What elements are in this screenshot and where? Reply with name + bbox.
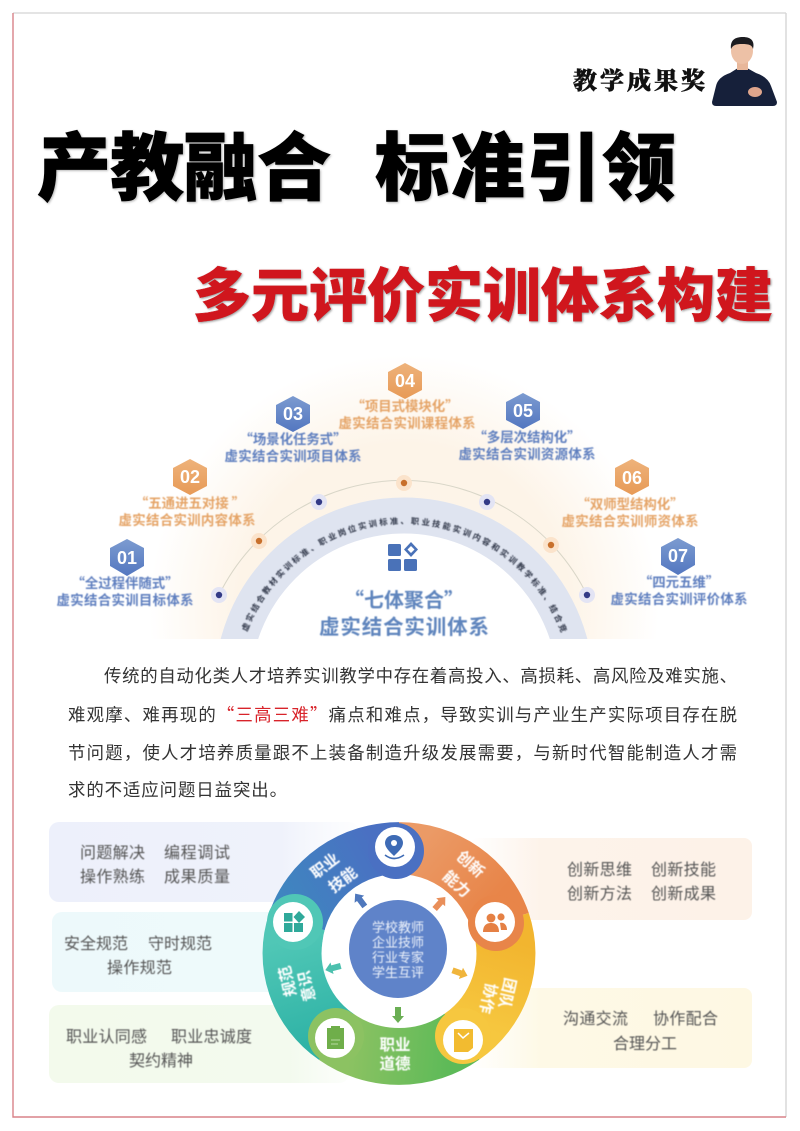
panel: right card innovation: 创新技能	[651, 856, 716, 880]
node 03: 03	[283, 404, 303, 424]
center disc: 企业技师	[372, 932, 424, 951]
node 04: 04	[395, 371, 415, 391]
chart: evaluation wheel	[267, 823, 524, 1074]
panel: left card skills: 问题解决	[80, 839, 145, 863]
node 06: 06	[622, 468, 642, 488]
node 06: 虚实结合实训师资体系	[562, 510, 698, 530]
arrow: to norms	[324, 960, 342, 976]
arrow: to ethics	[392, 1007, 404, 1023]
segment label: 创新能力	[438, 845, 490, 902]
segment heads	[267, 823, 524, 1064]
panel: right card teamwork: 合理分工	[613, 1030, 677, 1054]
paragraph: 节问题，使人才培养质量跟不上装备制造升级发展需要，与新时代智能制造人才需	[68, 740, 737, 765]
node 04: “项目式模块化”	[351, 395, 459, 415]
segment label: 职业道德	[379, 1033, 411, 1074]
icon: four squares	[388, 542, 418, 571]
icon: clipboard	[315, 1018, 355, 1058]
segment label: 规范意识: 意识	[292, 969, 320, 1004]
segment label: 团队协作: 团队	[494, 976, 522, 1011]
node 07: “四元五维”	[639, 571, 719, 591]
node 07: 07	[668, 546, 688, 566]
node 01: 虚实结合实训目标体系	[56, 589, 194, 609]
segment label: 规范意识	[273, 963, 320, 1004]
fan glow background	[140, 350, 670, 639]
node 07: 虚实结合实训评价体系	[610, 588, 748, 608]
icon: presenter portrait	[712, 37, 777, 106]
award label: 教学成果奖	[573, 61, 705, 96]
panel: left card ethics: 职业认同感	[66, 1023, 147, 1047]
node 06: “双师型结构化”	[576, 493, 684, 513]
node 03	[224, 396, 362, 465]
panel: right card teamwork	[470, 988, 752, 1068]
panel: left card norms	[52, 912, 342, 992]
arrow: to innovation	[430, 893, 450, 913]
node 06	[562, 459, 698, 530]
node 01	[56, 539, 194, 609]
center heading: 虚实结合实训体系	[319, 610, 489, 640]
center disc	[349, 900, 447, 998]
ring line	[219, 480, 587, 595]
paragraph: 求的不适应问题日益突出。	[68, 777, 287, 802]
segment label: 职业技能	[305, 847, 362, 897]
panel: left card norms: 安全规范	[64, 930, 128, 954]
center heading: “七体聚合”	[344, 584, 464, 613]
segment label: 职业道德: 职业	[379, 1033, 411, 1055]
node 01: 01	[117, 548, 137, 568]
icon: grid	[273, 902, 313, 942]
center heading	[319, 584, 489, 640]
title: 产教融合	[37, 109, 331, 216]
segment label: 规范意识: 规范	[273, 963, 301, 999]
arrow: to skills	[350, 890, 370, 910]
node 02: 02	[180, 467, 200, 487]
icon: note	[443, 1020, 483, 1060]
arrow: to teamwork	[450, 965, 470, 981]
node 02: “五通进五对接 ”	[135, 492, 245, 512]
node 01: “全过程伴随式”	[71, 572, 179, 592]
arch band caption: 虚实结合教材实训标准、职业岗位实训标准、职业技能实训内容和实训教学标准、结合竞赛和技能证书标准	[241, 516, 568, 634]
arch band	[220, 498, 588, 639]
panel: left card skills	[49, 822, 359, 902]
panel: right card teamwork: 协作配合	[653, 1005, 718, 1029]
panel: right card teamwork: 沟通交流	[563, 1005, 628, 1029]
panel: right card innovation: 创新方法	[567, 880, 632, 904]
node 02: 虚实结合实训内容体系	[118, 509, 256, 529]
title	[37, 109, 676, 216]
node 03: “场景化任务式”	[239, 428, 347, 448]
panel: left card ethics	[49, 1005, 349, 1083]
panel: right card innovation: 创新思维	[567, 856, 632, 880]
segment label: 职业技能: 技能	[323, 861, 362, 897]
paragraph: 传统的自动化类人才培养实训教学中存在着高投入、高损耗、高风险及难实施、	[104, 663, 737, 688]
panel: left card norms: 守时规范	[148, 930, 212, 954]
node 05: 05	[513, 401, 533, 421]
segment label: 创新能力: 能力	[438, 865, 476, 902]
segment label: 团队协作: 协作	[475, 981, 503, 1016]
panel: seven-system arch diagram	[56, 363, 748, 640]
center disc: 学生互评	[372, 962, 424, 981]
node 04	[338, 363, 476, 432]
center disc: 行业专家	[372, 947, 424, 966]
node 05: “多层次结构化”	[473, 426, 581, 446]
panel: left card skills: 操作熟练	[80, 863, 145, 887]
node 05: 虚实结合实训资源体系	[458, 443, 596, 463]
inner white disc	[322, 874, 474, 1026]
node 03: 虚实结合实训项目体系	[224, 445, 362, 465]
panel: left card skills: 成果质量	[164, 863, 230, 887]
paragraph: 难观摩、难再现的“三高三难”痛点和难点，导致实训与产业生产实际项目存在脱	[68, 702, 737, 727]
icon: location pin	[375, 827, 415, 867]
segment label: 职业道德: 道德	[379, 1052, 411, 1074]
panel: left card norms: 操作规范	[107, 954, 172, 978]
panel: right card innovation	[470, 838, 752, 920]
segment label: 团队协作	[475, 976, 522, 1016]
panel: left card ethics: 职业忠诚度	[171, 1023, 252, 1047]
title: 标准引领	[375, 109, 676, 216]
segment label: 创新能力: 创新	[452, 845, 490, 882]
node 05	[458, 393, 596, 463]
ring segments	[292, 851, 506, 1056]
subtitle: 多元评价实训体系构建	[193, 249, 773, 333]
icon: people	[475, 902, 515, 942]
panel: right card innovation: 创新成果	[651, 880, 716, 904]
panel: left card skills: 编程调试	[164, 839, 230, 863]
node 07	[610, 538, 748, 608]
node 02	[118, 459, 256, 529]
node 04: 虚实结合实训课程体系	[338, 412, 476, 432]
panel: left card ethics: 契约精神	[129, 1047, 193, 1071]
paragraph	[68, 663, 737, 802]
segment label: 职业技能: 职业	[305, 847, 343, 883]
center disc: 学校教师	[372, 917, 424, 936]
ring dots	[211, 475, 595, 603]
